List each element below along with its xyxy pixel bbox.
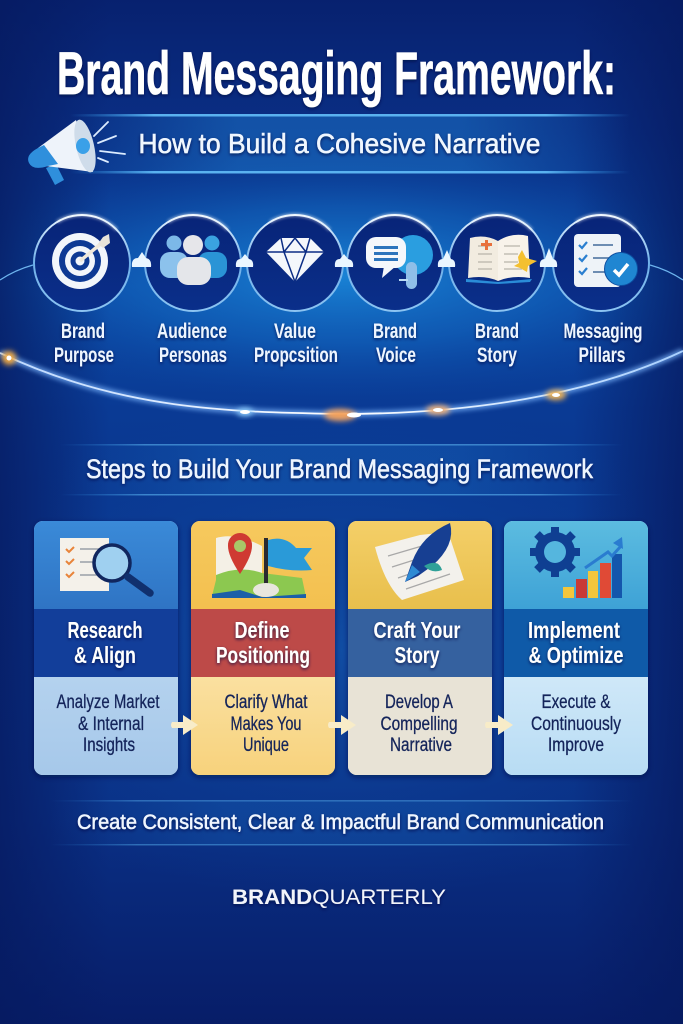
description: Improve <box>548 735 604 756</box>
circle: Brand Voice <box>347 215 443 311</box>
icon: map book, pin and flag <box>212 533 312 598</box>
description: Compelling <box>380 714 458 735</box>
label: Audience Personas: Audience <box>157 319 227 343</box>
heading: Positioning <box>216 642 310 668</box>
icon: diamond <box>266 238 324 282</box>
section heading: Steps to Build Your Brand Messaging Framework <box>86 454 593 484</box>
label: Audience Personas <box>157 319 227 367</box>
circle rim highlights <box>57 215 636 230</box>
label: Messaging Pillars <box>564 319 642 367</box>
description: Analyze Market <box>56 692 160 713</box>
label: Brand Purpose: Brand <box>61 319 105 343</box>
description: Narrative <box>390 735 452 756</box>
heading <box>68 617 142 668</box>
arrow: step 1 to 2 <box>171 715 198 735</box>
description: & Internal <box>78 714 144 735</box>
card: Research & Align <box>34 521 178 775</box>
description: Unique <box>243 735 289 756</box>
logo: BrandQuarterly: BRANDQUARTERLY <box>232 886 446 909</box>
description <box>224 692 308 756</box>
circle: Audience Personas <box>145 215 241 311</box>
icon: checklist and magnifier <box>60 538 150 593</box>
icon: book and quill <box>375 523 464 600</box>
label: Messaging Pillars: Messaging <box>564 319 642 343</box>
description: Develop A <box>385 692 453 713</box>
heading: Implement <box>528 617 620 643</box>
connectors between circles <box>132 248 557 267</box>
label: Brand Voice <box>373 319 417 367</box>
label: Value Proposition: Propcsition <box>254 343 338 367</box>
icon: speech bubbles <box>366 235 433 289</box>
icon: target <box>52 233 110 289</box>
subtitle: How to Build a Cohesive Narrative <box>138 128 540 159</box>
description: Execute & <box>542 692 611 713</box>
label: Brand Story: Brand <box>475 319 519 343</box>
heading <box>528 617 624 668</box>
icon: open book with star <box>466 235 537 284</box>
glowing arc <box>0 351 683 421</box>
circle: Value Proposition <box>247 215 343 311</box>
description <box>531 692 621 756</box>
label: Value Proposition <box>254 319 338 367</box>
label: Value Proposition: Value <box>274 319 316 343</box>
section heading ribbon <box>60 444 623 496</box>
arc sparkles <box>2 351 566 421</box>
heading: Research <box>68 617 142 643</box>
thin side arcs <box>0 265 683 280</box>
tagline: Create Consistent, Clear & Impactful Brand Communication <box>77 810 604 834</box>
heading <box>374 617 460 668</box>
description: Continuously <box>531 714 621 735</box>
label: Audience Personas: Personas <box>159 343 227 367</box>
label: Messaging Pillars: Pillars <box>578 343 626 367</box>
arrow: step 3 to 4 <box>485 715 513 735</box>
label: Brand Story <box>475 319 519 367</box>
label: Brand Voice: Voice <box>376 343 416 367</box>
circle: Brand Purpose <box>34 215 130 311</box>
label: Brand Purpose: Purpose <box>54 343 114 367</box>
icon: people <box>160 235 227 285</box>
heading: Define <box>234 617 290 643</box>
icon: megaphone <box>28 118 125 185</box>
icon: checklist with badge <box>574 234 638 287</box>
description: Makes You <box>230 714 302 735</box>
heading: Craft Your <box>374 617 460 643</box>
heading: & Optimize <box>528 642 624 668</box>
subtitle ribbon <box>70 114 630 174</box>
card: Implement & Optimize <box>504 521 648 775</box>
label: Brand Voice: Brand <box>373 319 417 343</box>
heading <box>216 617 310 668</box>
arrow: step 2 to 3 <box>328 715 356 735</box>
label: Brand Purpose <box>54 319 114 367</box>
description <box>56 692 160 756</box>
circle: Messaging Pillars <box>553 215 649 311</box>
icon: gear and bar chart <box>530 527 623 598</box>
description: Insights <box>83 735 135 756</box>
circle: Brand Story <box>449 215 545 311</box>
card: Craft Your Story <box>348 521 492 775</box>
description: Clarify What <box>224 692 308 713</box>
card: Define Positioning <box>191 521 335 775</box>
description <box>380 692 458 756</box>
heading: & Align <box>74 642 136 668</box>
label: Brand Story: Story <box>477 343 517 367</box>
tagline ribbon <box>50 800 633 846</box>
heading: Story <box>394 642 440 668</box>
